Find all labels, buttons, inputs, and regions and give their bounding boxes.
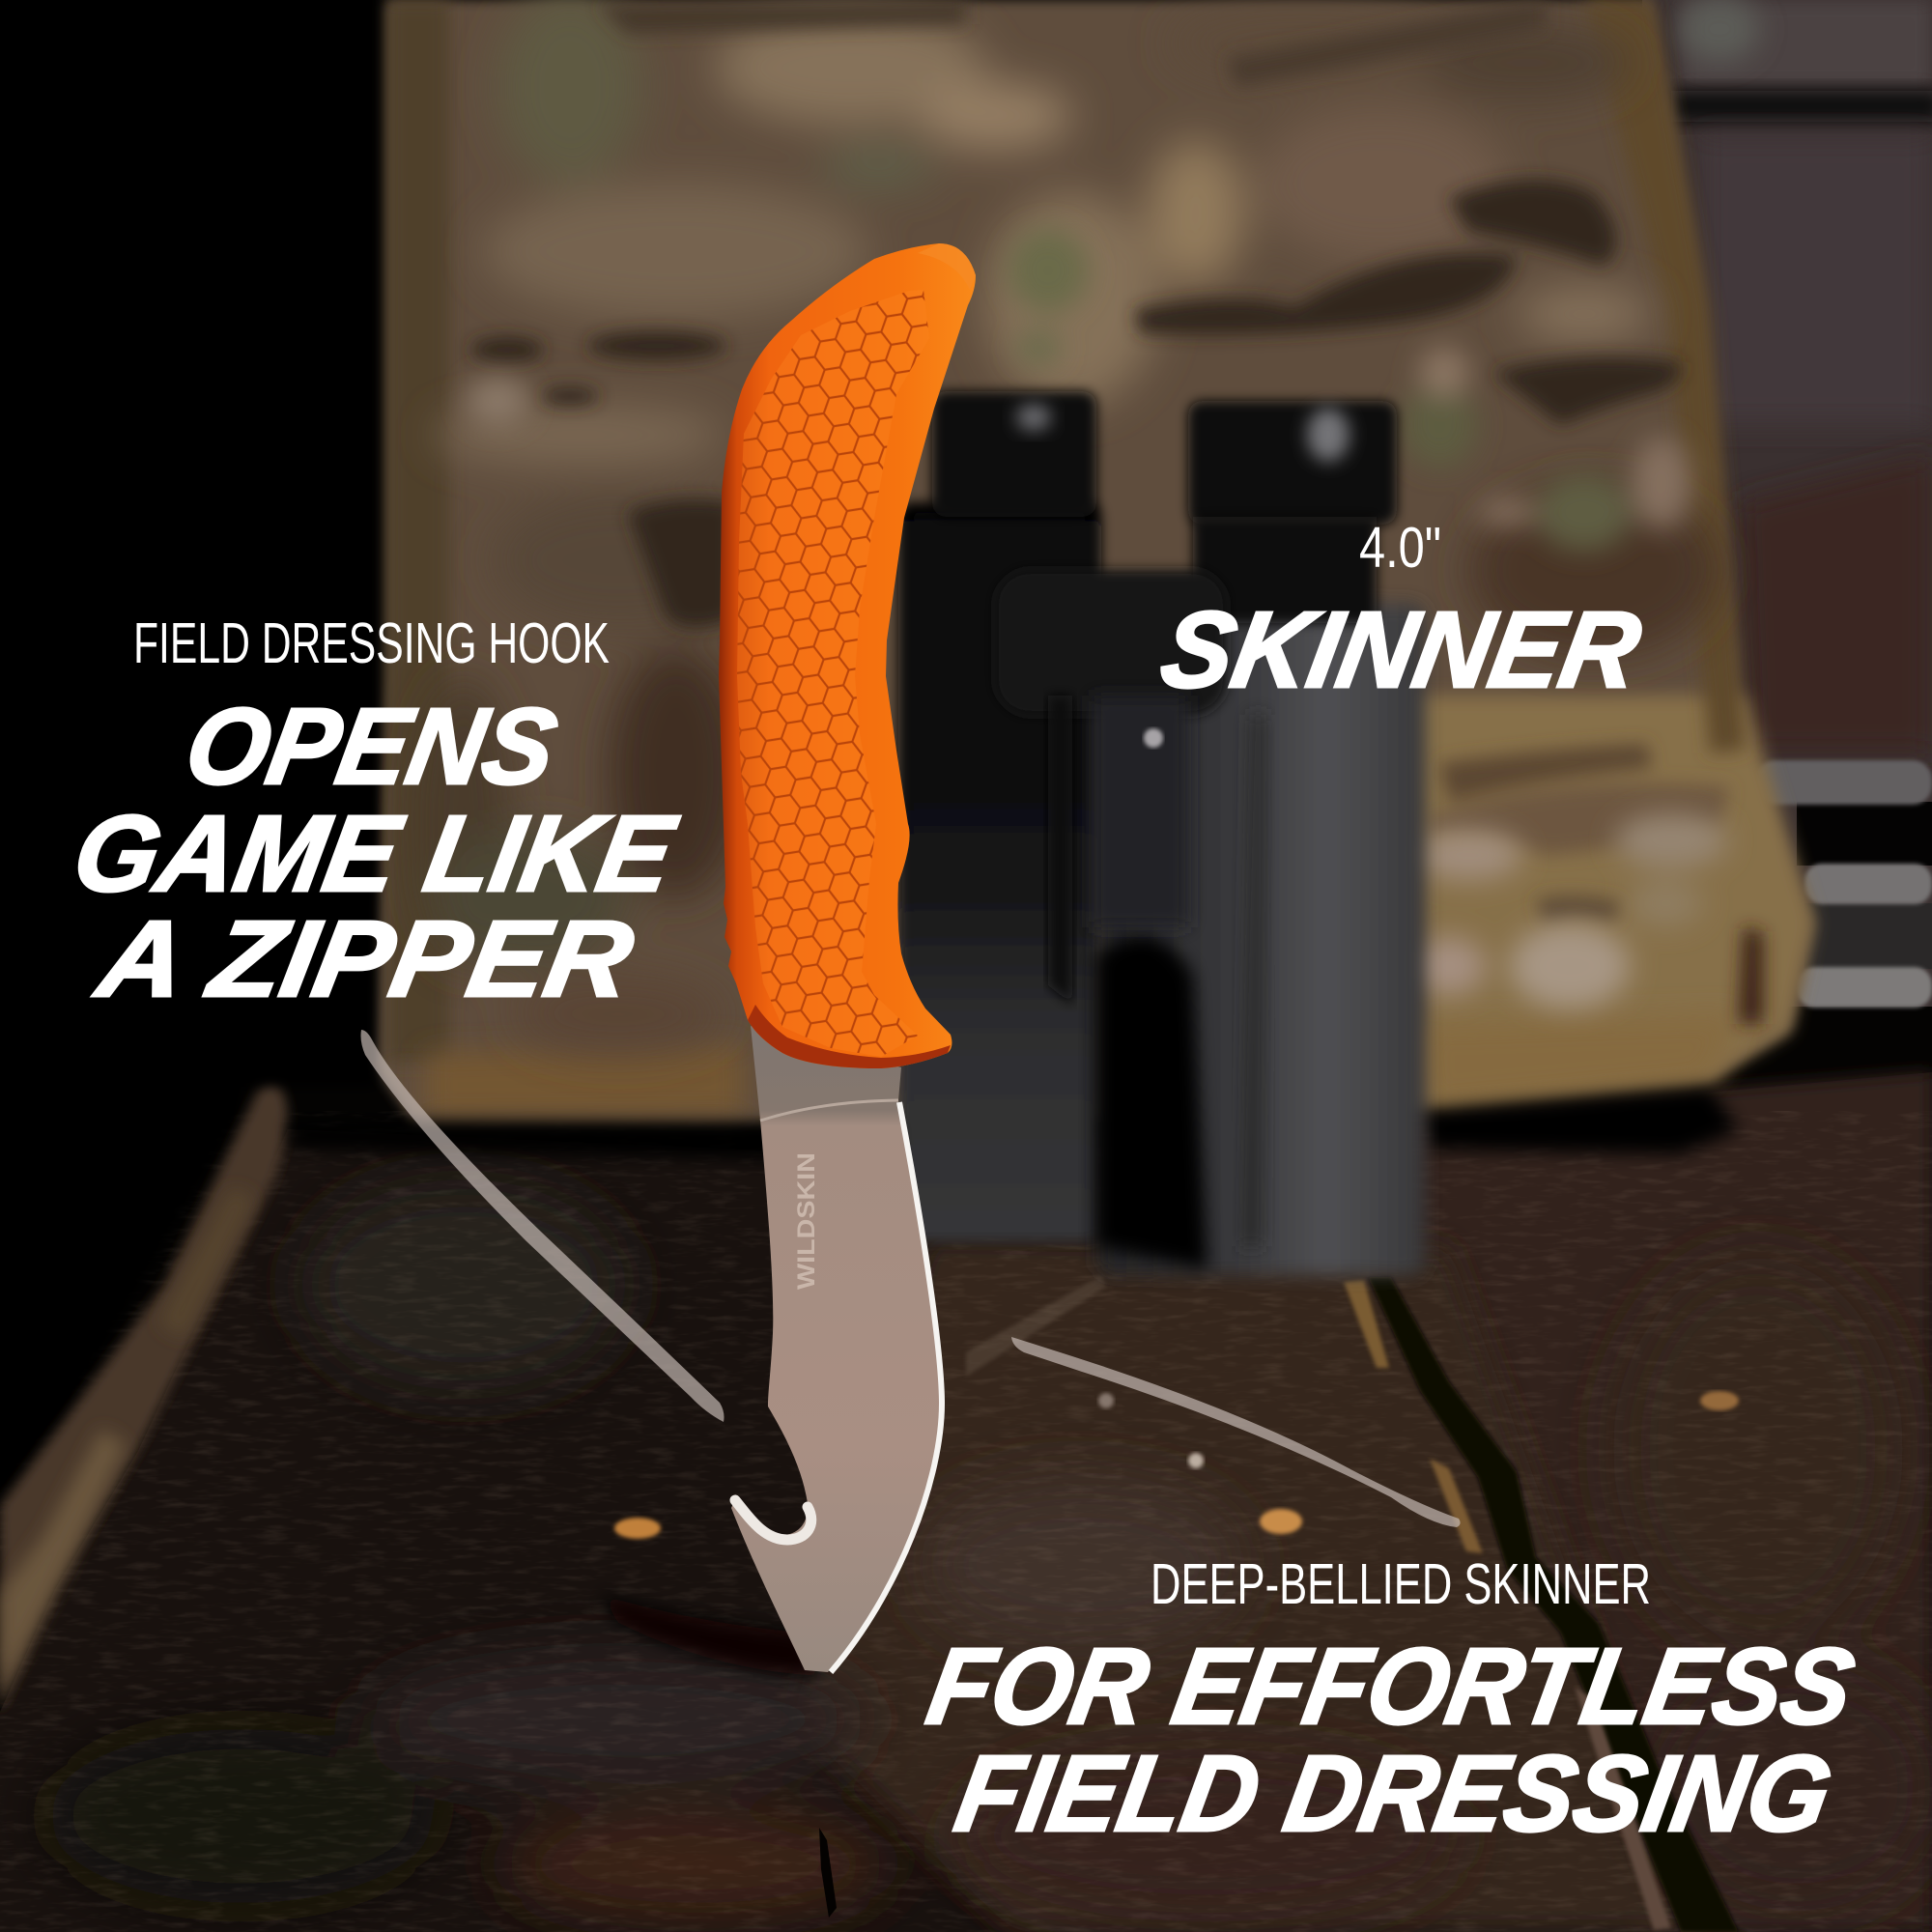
callout stroke: belly [1011, 1337, 1461, 1527]
headline: GAME LIKE [66, 793, 685, 914]
knife handle [715, 232, 985, 1082]
binoculars: bridge [995, 570, 1227, 715]
table: crack [1368, 1277, 1739, 1932]
background: binoculars [898, 391, 1425, 1275]
text block: deep-bellied skinner [920, 1552, 1862, 1854]
background: camouflage pack [372, 0, 1814, 1125]
knife [715, 232, 985, 1672]
blade: cutting edge [831, 1102, 942, 1672]
table: left board edge [0, 1077, 288, 1712]
text block: field dressing hook [66, 611, 685, 1019]
subheading: DEEP-BELLIED SKINNER [1151, 1552, 1651, 1616]
knife blade [731, 1026, 943, 1672]
heading: 4.0" skinner [1153, 516, 1649, 710]
background: wooden table [0, 1063, 1932, 1932]
background: right wall [1642, 0, 1932, 1122]
subheading: FIELD DRESSING HOOK [133, 611, 610, 675]
callout stroke: hook [361, 1030, 724, 1422]
headline: FIELD DRESSING [948, 1733, 1840, 1854]
handle: lower rim shadow [748, 1005, 951, 1068]
product name: SKINNER [1153, 589, 1649, 710]
pack: bottom strap [425, 1043, 744, 1119]
headline: FOR EFFORTLESS [920, 1626, 1862, 1747]
size label: 4.0" [1359, 516, 1441, 580]
headline [66, 686, 685, 1019]
pack: right side panel [1410, 696, 1814, 1111]
headline: A ZIPPER [88, 898, 641, 1019]
left side shadow [0, 0, 377, 1087]
background: shadow under pack [290, 1121, 966, 1164]
blade: hook edge [735, 1500, 811, 1540]
headline [920, 1626, 1862, 1854]
headline: OPENS [178, 686, 565, 807]
binoculars: left barrel [898, 502, 1101, 1241]
binoculars: right barrel [1096, 604, 1425, 1275]
pack: left strap [386, 0, 449, 1063]
table: left of board, black [0, 1063, 251, 1526]
pack: right strap [1584, 0, 1746, 753]
table: knife shadow [599, 1594, 821, 1676]
blade logo: WILDSKIN [793, 1152, 820, 1290]
